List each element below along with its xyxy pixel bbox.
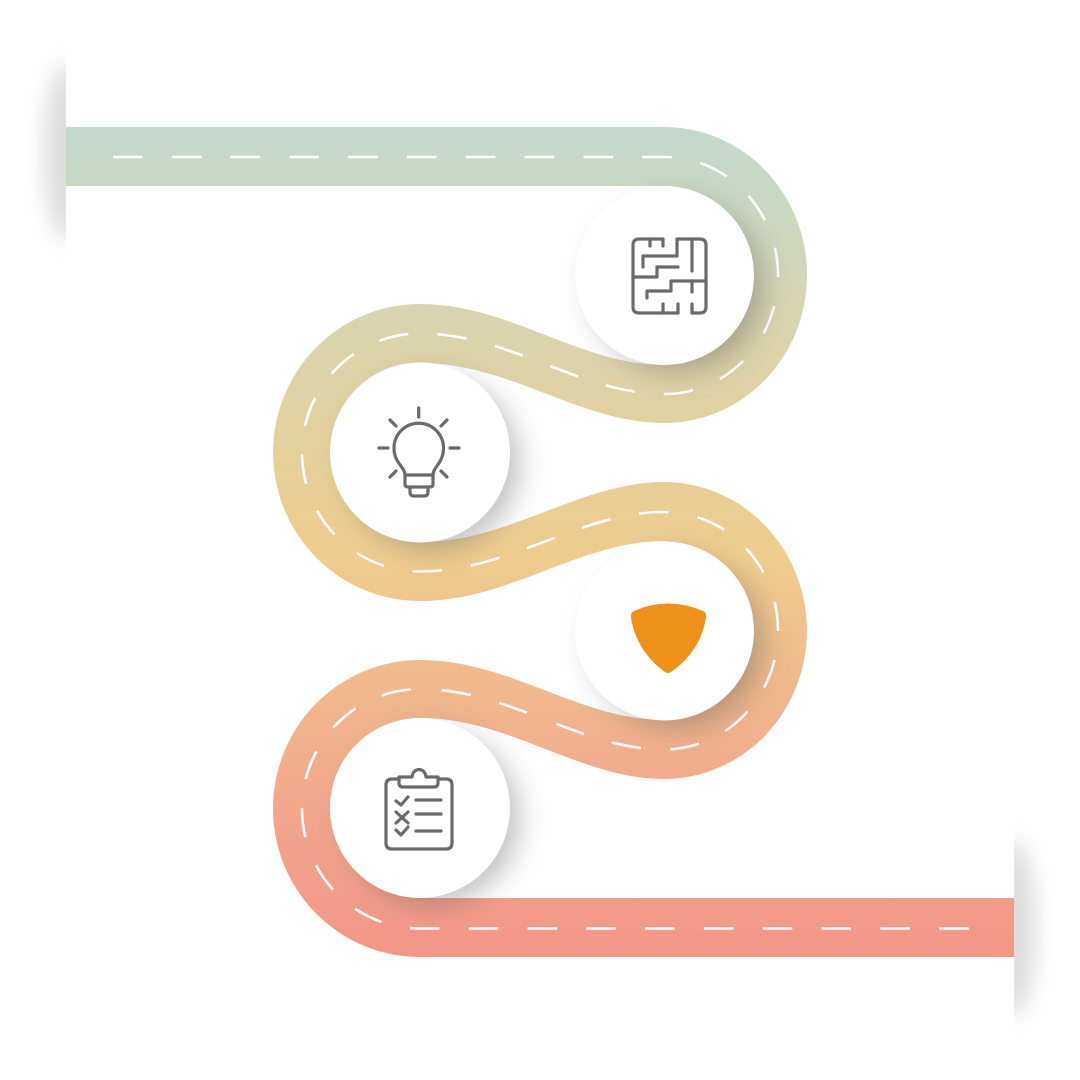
step 3: orange shield node (575, 542, 762, 727)
node shadow (348, 378, 518, 548)
node disc (575, 542, 754, 720)
icon: orange shield (631, 604, 706, 673)
step 1: maze node (575, 186, 762, 371)
left edge shadow (37, 63, 66, 241)
node shadow (592, 201, 762, 371)
right edge shadow (1014, 839, 1043, 1017)
node disc (330, 362, 510, 542)
icon: light bulb (379, 408, 459, 496)
node disc (330, 718, 510, 898)
step 2: light bulb node (330, 362, 518, 548)
node shadow (592, 557, 762, 727)
step 4: clipboard node (330, 718, 518, 903)
node shadow (348, 733, 518, 903)
dashed centre line (113, 157, 971, 928)
icon: checklist clipboard (386, 770, 452, 849)
node disc (575, 186, 754, 365)
icon: maze (633, 239, 706, 313)
winding road band (66, 127, 1014, 957)
